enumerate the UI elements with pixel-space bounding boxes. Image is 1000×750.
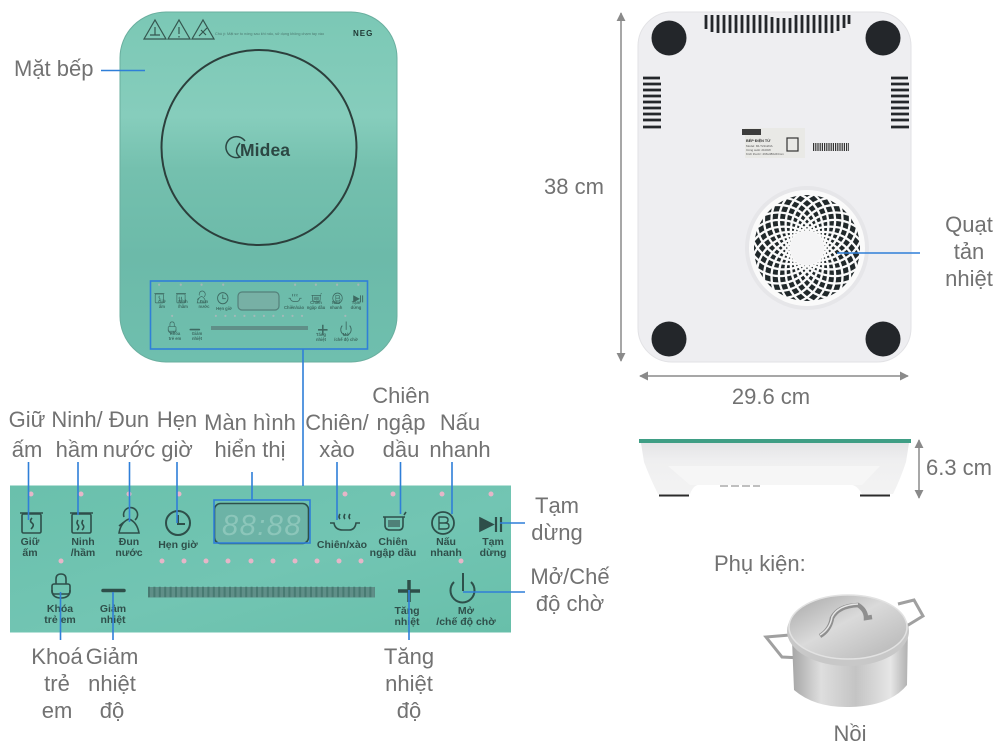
- panel button labels: Ninh: [71, 536, 95, 548]
- panel button labels: Giảm: [100, 603, 126, 615]
- leader lines: [28, 349, 525, 640]
- labels below panel: trẻ: [44, 671, 70, 696]
- labels below panel: độ: [397, 698, 421, 723]
- panel button labels: Khóa: [47, 603, 73, 615]
- callout: Quạt tản nhiệt: Quạt: [945, 212, 993, 237]
- label: Mặt bếp: Mặt bếp: [14, 56, 94, 81]
- labels below panel: nhiệt: [385, 671, 433, 696]
- panel button labels: ngập dầu: [370, 547, 416, 559]
- mini control panel: Giảm: [192, 331, 203, 336]
- panel: underside view: [638, 12, 911, 362]
- labels below panel: Giảm: [86, 644, 138, 669]
- panel: cooktop front view: [120, 12, 397, 362]
- panel button labels: Chiên/xào: [317, 539, 367, 551]
- cooking zone ring: [162, 50, 356, 245]
- panel: control panel enlarged: [10, 486, 511, 632]
- product label: Kích thước: 296x380x63mm: [746, 152, 784, 156]
- logo: Midea: Midea: [240, 140, 290, 160]
- labels right of panel: [530, 493, 610, 616]
- labels above panel: nhanh: [429, 437, 491, 462]
- labels right of panel: Tạm: [535, 493, 579, 518]
- labels below panel: độ: [100, 698, 124, 723]
- panel button labels: /chế độ chờ: [436, 616, 496, 628]
- mini control panel: Hẹn giờ: [216, 306, 232, 311]
- icon: cooking pot: [766, 595, 923, 707]
- labels below panel: em: [42, 698, 72, 723]
- display: 88:88: [222, 510, 302, 542]
- mini control panel: ấm: [159, 304, 165, 309]
- temperature slider: [148, 587, 375, 598]
- mini control panel: dừng: [351, 305, 362, 310]
- mini control panel: Tăng: [316, 332, 326, 337]
- labels above panel: nước: [103, 437, 155, 462]
- labels above panel: [9, 383, 491, 462]
- mini control panel: /hầm: [178, 304, 188, 309]
- side vents: [643, 78, 909, 127]
- labels above panel: ngập: [377, 410, 425, 435]
- dimension: thickness 6.3 cm: [919, 440, 992, 498]
- callout: Quạt tản nhiệt: tản: [954, 239, 984, 264]
- display: [214, 504, 308, 544]
- mini control panel: Nấu: [332, 300, 340, 305]
- labels above panel: giờ: [161, 437, 193, 462]
- mini control panel: Tạm: [352, 300, 361, 305]
- product label: BẾP ĐIỆN TỪ: [746, 138, 771, 143]
- icon: warning triangles: [144, 20, 214, 39]
- labels below panel: nhiệt: [88, 671, 136, 696]
- panel button labels: Tạm: [482, 536, 504, 548]
- dimension: width 29.6 cm: 29.6 cm: [732, 384, 810, 409]
- product label: Model: MI-T2112DA: [746, 144, 773, 148]
- mini control panel: /chế độ chờ: [334, 337, 358, 342]
- labels right of panel: dừng: [531, 520, 583, 545]
- dimension: thickness 6.3 cm: 6.3 cm: [926, 455, 992, 480]
- text: warning note: Chú ý: Mặt sơ to nóng sau khi nấu, sử dụng không chạm tay vào: [215, 32, 324, 36]
- mini control panel: [150, 281, 368, 349]
- panel button labels: nước: [115, 547, 143, 559]
- mini control panel: nhiệt: [316, 337, 327, 342]
- panel: side view: [639, 439, 911, 496]
- mini control panel: nước: [199, 304, 210, 309]
- labels above panel: xào: [319, 437, 355, 462]
- top vents: [706, 15, 849, 33]
- panel button labels: Đun: [119, 536, 139, 548]
- panel button labels: nhanh: [430, 547, 462, 559]
- labels above panel: ấm: [12, 437, 42, 462]
- mini control panel: trẻ em: [169, 336, 182, 341]
- mini control panel: Đun: [200, 299, 209, 304]
- panel button labels: dừng: [480, 547, 506, 559]
- labels above panel: hầm: [56, 437, 98, 462]
- panel button labels: trẻ em: [44, 614, 76, 626]
- callout: Quạt tản nhiệt: [837, 212, 993, 291]
- dimension: height 38 cm: 38 cm: [544, 174, 604, 199]
- mini control panel: Khóa: [170, 331, 181, 336]
- labels below panel: Tăng: [384, 644, 434, 669]
- mini control panel: ngập dầu: [307, 305, 326, 310]
- labels right of panel: độ chờ: [536, 591, 604, 616]
- logo: Midea: [226, 137, 290, 160]
- mini control panel: Giữ: [158, 299, 167, 304]
- mini control panel: Chiên/xào: [284, 305, 304, 310]
- barcode: [813, 143, 849, 151]
- labels below panel: [31, 644, 434, 723]
- labels above panel: Đun: [109, 407, 149, 432]
- fan grille: [745, 186, 869, 310]
- product label: [742, 128, 805, 158]
- panel button labels: Giữ: [21, 536, 40, 548]
- labels below panel: Khoá: [31, 644, 83, 669]
- mini control panel: nhiệt: [192, 336, 203, 341]
- product label: Công suất: 2100W: [746, 148, 771, 152]
- labels above panel: Ninh/: [51, 407, 104, 432]
- panel button labels: /hầm: [71, 547, 95, 559]
- labels above panel: hiển thị: [215, 437, 285, 462]
- mini control panel: nhanh: [330, 305, 343, 310]
- mini control panel: Mở: [343, 332, 349, 337]
- panel button labels: Chiên: [378, 536, 408, 548]
- labels above panel: dầu: [383, 437, 419, 462]
- panel button labels: Tăng: [394, 605, 420, 617]
- labels above panel: Hẹn: [157, 407, 197, 432]
- panel button labels: nhiệt: [394, 616, 420, 628]
- panel button labels: Nấu: [436, 536, 456, 548]
- panel button labels: Hẹn giờ: [158, 539, 198, 551]
- labels above panel: Màn hình: [204, 410, 296, 435]
- labels above panel: Chiên: [372, 383, 430, 408]
- text: NEG mark: NEG: [353, 29, 373, 38]
- labels right of panel: Mở/Chế: [530, 564, 610, 589]
- mini control panel: Ninh: [178, 299, 188, 304]
- panel button labels: ấm: [22, 547, 38, 559]
- rubber feet: [652, 20, 900, 356]
- labels above panel: Giữ: [9, 407, 46, 432]
- label: Mặt bếp: [14, 56, 145, 81]
- labels above panel: Chiên/: [305, 410, 370, 435]
- panel button labels: [21, 536, 506, 628]
- mini control panel: Chiên: [310, 300, 322, 305]
- heading: Phụ kiện: Phụ kiện:: [714, 551, 806, 576]
- callout: Quạt tản nhiệt: nhiệt: [945, 266, 993, 291]
- labels above panel: Nấu: [440, 410, 480, 435]
- panel button labels: nhiệt: [100, 614, 126, 626]
- label: Nồi: Nồi: [833, 721, 867, 746]
- panel button labels: Mở: [458, 605, 475, 617]
